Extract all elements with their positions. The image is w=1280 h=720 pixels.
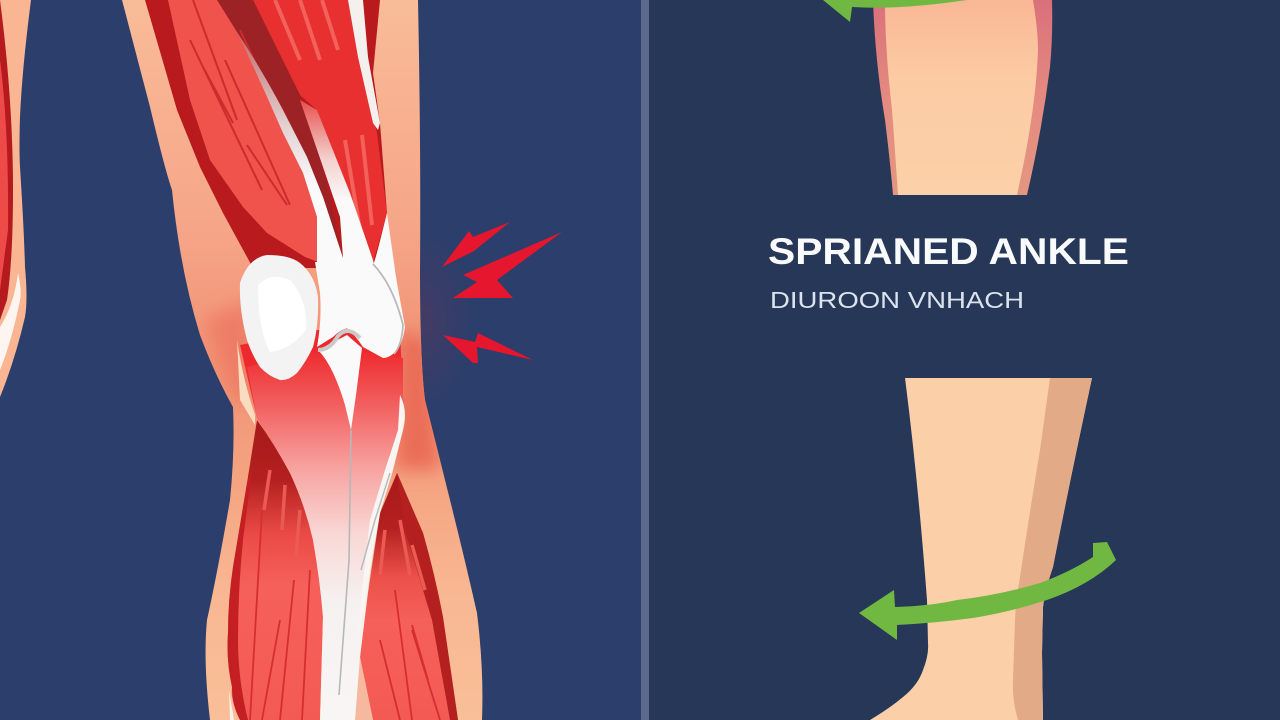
subtitle: DIUROON VNHACH <box>770 287 1024 313</box>
white right edge of the shin <box>358 395 405 640</box>
illustration: lower ankle and foot <box>870 378 1092 720</box>
sliver of white lower left <box>229 690 234 720</box>
arrow: lower green rotation arrow <box>859 542 1116 640</box>
leg skin silhouette <box>122 0 482 720</box>
knee bruising <box>240 330 404 470</box>
skin gap lower right <box>355 657 373 720</box>
femur bone <box>315 220 405 358</box>
shin connective tissue <box>247 350 403 720</box>
pain glow <box>375 230 475 410</box>
white tendons <box>237 0 395 270</box>
cream skin highlight beside knee <box>237 340 255 425</box>
illustration: injured knee anatomy <box>122 0 482 720</box>
panel divider <box>641 0 649 720</box>
lower leg muscles <box>228 420 458 720</box>
illustration: upper limb <box>873 0 1052 195</box>
panel: ankle background <box>649 0 1280 720</box>
upper thigh muscle <box>145 0 387 268</box>
tibia tendon <box>318 335 362 430</box>
reddened skin beside the knee <box>205 300 440 470</box>
arrow: upper green rotation arrow <box>823 0 967 22</box>
illustration: partial second leg <box>0 0 31 397</box>
patella <box>240 255 318 380</box>
icon: pain lightning marks <box>442 222 562 363</box>
panel: knee background <box>0 0 642 720</box>
title: SPRIANED ANKLE <box>768 231 1129 272</box>
